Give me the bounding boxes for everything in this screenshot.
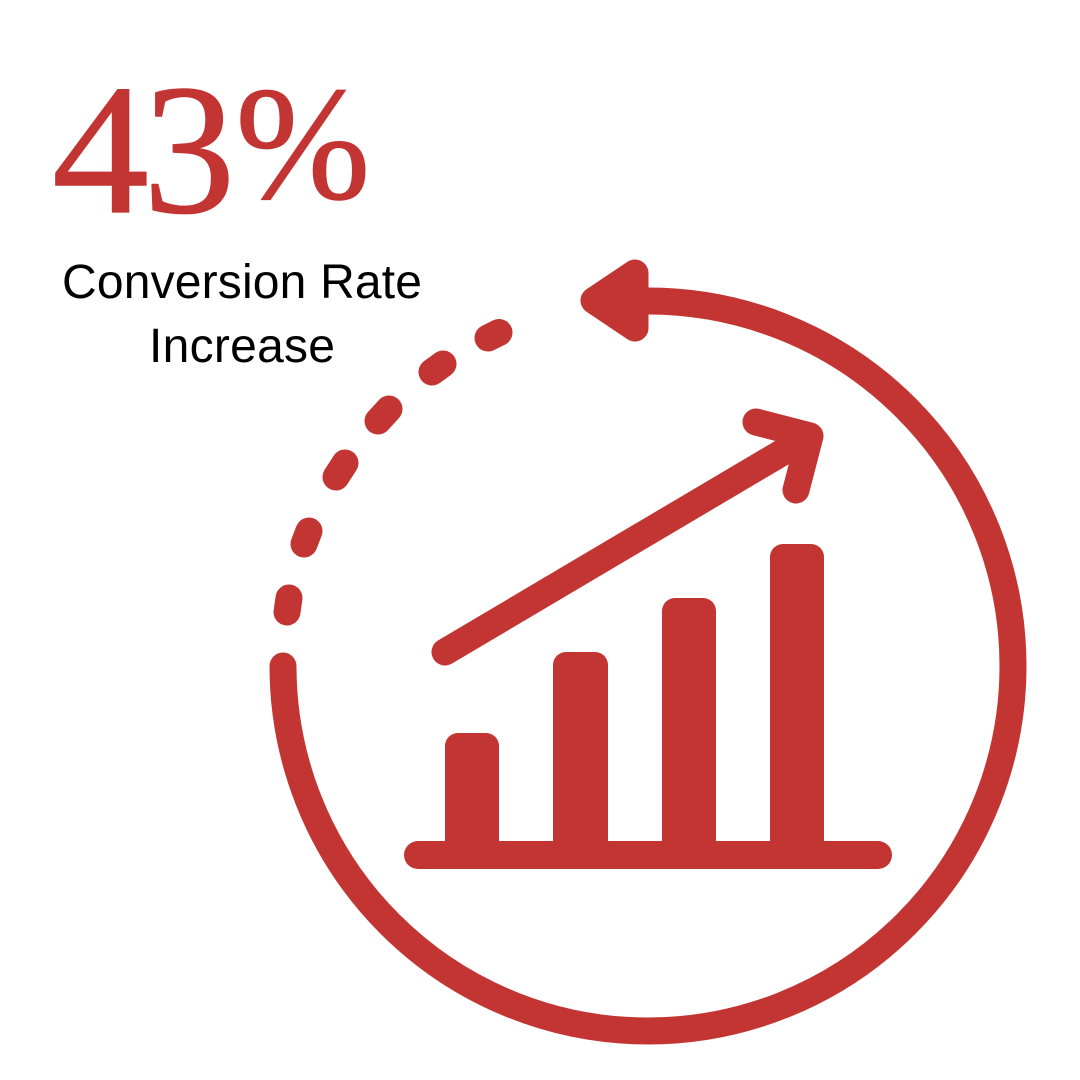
text block: Conversion Rate Increase (62, 256, 422, 373)
bar 1 (445, 733, 499, 850)
heading: 43%: % (235, 55, 370, 234)
icon: circular arrow (283, 273, 1013, 1031)
bar chart icon (404, 544, 892, 869)
bar 3 (662, 598, 716, 850)
bar 2 (553, 652, 608, 850)
arrow head (594, 273, 635, 328)
heading: 43% (52, 47, 370, 253)
trend arrow (445, 422, 810, 652)
solid circular arc (283, 301, 1013, 1031)
heading: 43%: 3 (143, 47, 235, 253)
dashed arc (287, 332, 499, 612)
text block: Conversion Rate Increase: Conversion Rate (62, 256, 422, 309)
baseline (404, 841, 892, 869)
bar 4 (770, 544, 824, 850)
heading: 43%: 4 (52, 47, 149, 253)
text block: Conversion Rate Increase: Increase (149, 320, 335, 373)
